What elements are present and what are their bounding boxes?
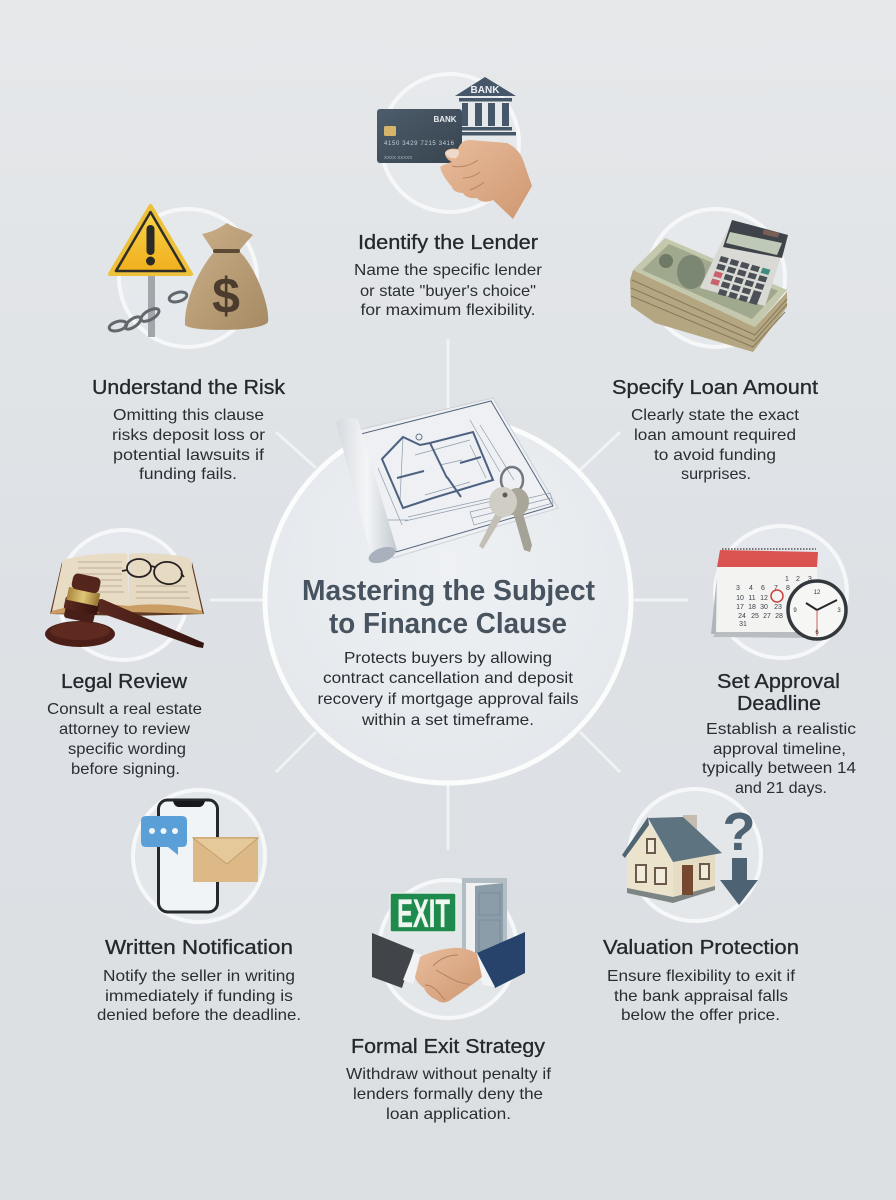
panel: understand the risk (92, 206, 286, 483)
text block: and 21 days. (735, 780, 827, 797)
icon: bank, card and hand: XXXX XXXXX (384, 155, 412, 160)
text block: for maximum flexibility. (360, 302, 536, 319)
text block: below the offer price. (621, 1007, 780, 1024)
text block: before signing. (71, 761, 180, 778)
text block: funding fails. (139, 466, 237, 483)
icon: calendar and clock: 3 (808, 576, 812, 583)
text block: immediately if funding is (105, 988, 293, 1005)
icon: calendar and clock: 8 (786, 585, 790, 592)
panel: legal review (45, 553, 204, 778)
text block (607, 968, 796, 1024)
icon: calendar and clock: 12 (760, 595, 768, 602)
icon: bank, card and hand (377, 77, 532, 219)
text block: loan application. (386, 1106, 511, 1123)
icon: calendar and clock: 31 (739, 621, 747, 628)
icon: calendar and clock: 12 (814, 590, 821, 596)
panel: formal exit strategy (346, 878, 552, 1123)
title (302, 575, 595, 640)
text block: Consult a real estate (47, 701, 202, 718)
icon: phone, chat bubble and envelope (141, 800, 258, 912)
title: Mastering the Subject (302, 575, 595, 607)
heading: Specify Loan Amount (612, 377, 818, 399)
icon: calendar and clock: 7 (774, 585, 778, 592)
text block: potential lawsuits if (113, 447, 265, 464)
text block: risks deposit loss or (112, 427, 266, 444)
icon: calendar and clock (711, 549, 846, 639)
icon: warning sign, broken chain and money bag: $ (212, 268, 240, 324)
text block: Clearly state the exact (631, 407, 800, 424)
panel: central hub (265, 398, 631, 783)
hub description: Protects buyers by allowing (344, 650, 552, 667)
hub circle (265, 417, 631, 783)
icon: calendar and clock: 1 (785, 576, 789, 583)
text block (112, 407, 266, 483)
icon: bank, card and hand: 4150 3429 7215 3416 (384, 141, 455, 147)
panel: identify the lender (354, 77, 543, 319)
icon: calendar and clock: 11 (748, 595, 756, 602)
text block: Ensure flexibility to exit if (607, 968, 796, 985)
text block: to avoid funding (654, 447, 776, 464)
icon: calendar and clock: 18 (748, 604, 756, 611)
heading: Identify the Lender (358, 232, 538, 254)
text block (47, 701, 202, 778)
icon: calendar and clock: 28 (775, 613, 783, 620)
heading: Written Notification (105, 937, 293, 959)
icon: bank, card and hand: BANK (433, 115, 457, 124)
icon: warning sign, broken chain and money bag (108, 206, 268, 337)
icon: calendar and clock: 10 (736, 595, 744, 602)
icon: bank, card and hand: BANK (471, 85, 500, 96)
icon: calendar and clock: 23 (774, 604, 782, 611)
text block (346, 1066, 552, 1123)
text block: attorney to review (59, 721, 190, 738)
hub description: recovery if mortgage approval fails (318, 691, 578, 708)
icon: house with question mark and down arrow (622, 802, 758, 905)
heading: Understand the Risk (92, 377, 286, 399)
heading: Deadline (737, 693, 821, 715)
heading: Legal Review (61, 671, 188, 693)
icon: calendar and clock: 4 (749, 585, 753, 592)
icon: calendar and clock: 3 (736, 585, 740, 592)
icon: exit sign, door and handshake (372, 878, 525, 1003)
icon: calendar and clock: 9 (793, 608, 797, 614)
text block: the bank appraisal falls (614, 988, 788, 1005)
text block: typically between 14 (702, 760, 856, 777)
icon: law book, glasses and gavel (45, 553, 204, 648)
title: to Finance Clause (329, 608, 567, 640)
icon: calendar and clock: 30 (760, 604, 768, 611)
hub description: contract cancellation and deposit (323, 670, 574, 687)
heading: Formal Exit Strategy (351, 1036, 545, 1058)
text block: specific wording (68, 741, 186, 758)
panel: specify loan amount (612, 220, 818, 483)
text block: surprises. (681, 466, 751, 483)
icon: calendar and clock: 6 (815, 630, 819, 636)
text block: Withdraw without penalty if (346, 1066, 552, 1083)
icon: calendar and clock: 3 (837, 608, 841, 614)
panel: written notification (97, 800, 301, 1024)
text block (97, 968, 301, 1024)
text block (631, 407, 800, 483)
panel: set approval deadline (702, 549, 856, 797)
text block: approval timeline, (713, 741, 846, 758)
icon: cash stack and calculator (630, 220, 788, 352)
icon: house with question mark and down arrow: ? (722, 802, 756, 862)
text block: Name the specific lender (354, 262, 543, 279)
text block: denied before the deadline. (97, 1007, 301, 1024)
icon: blueprint and keys (336, 398, 558, 566)
heading: Set Approval (717, 671, 840, 693)
hub description (318, 650, 578, 729)
icon: calendar and clock: 17 (736, 604, 744, 611)
text block: Notify the seller in writing (103, 968, 295, 985)
text block (702, 721, 856, 797)
icon: calendar and clock: 24 (738, 613, 746, 620)
text block: loan amount required (634, 427, 796, 444)
icon: calendar and clock: 2 (796, 576, 800, 583)
text block: or state "buyer's choice" (360, 283, 536, 300)
text block: Establish a realistic (706, 721, 856, 738)
icon: exit sign, door and handshake: EXIT (397, 892, 450, 936)
text block (354, 262, 543, 319)
panel: valuation protection (603, 802, 799, 1024)
hub description: within a set timeframe. (361, 712, 534, 729)
icon: calendar and clock: 6 (761, 585, 765, 592)
icon: calendar and clock: 25 (751, 613, 759, 620)
text block: Omitting this clause (113, 407, 264, 424)
heading (717, 671, 840, 715)
text block: lenders formally deny the (353, 1086, 543, 1103)
icon: calendar and clock: 27 (763, 613, 771, 620)
heading: Valuation Protection (603, 937, 799, 959)
